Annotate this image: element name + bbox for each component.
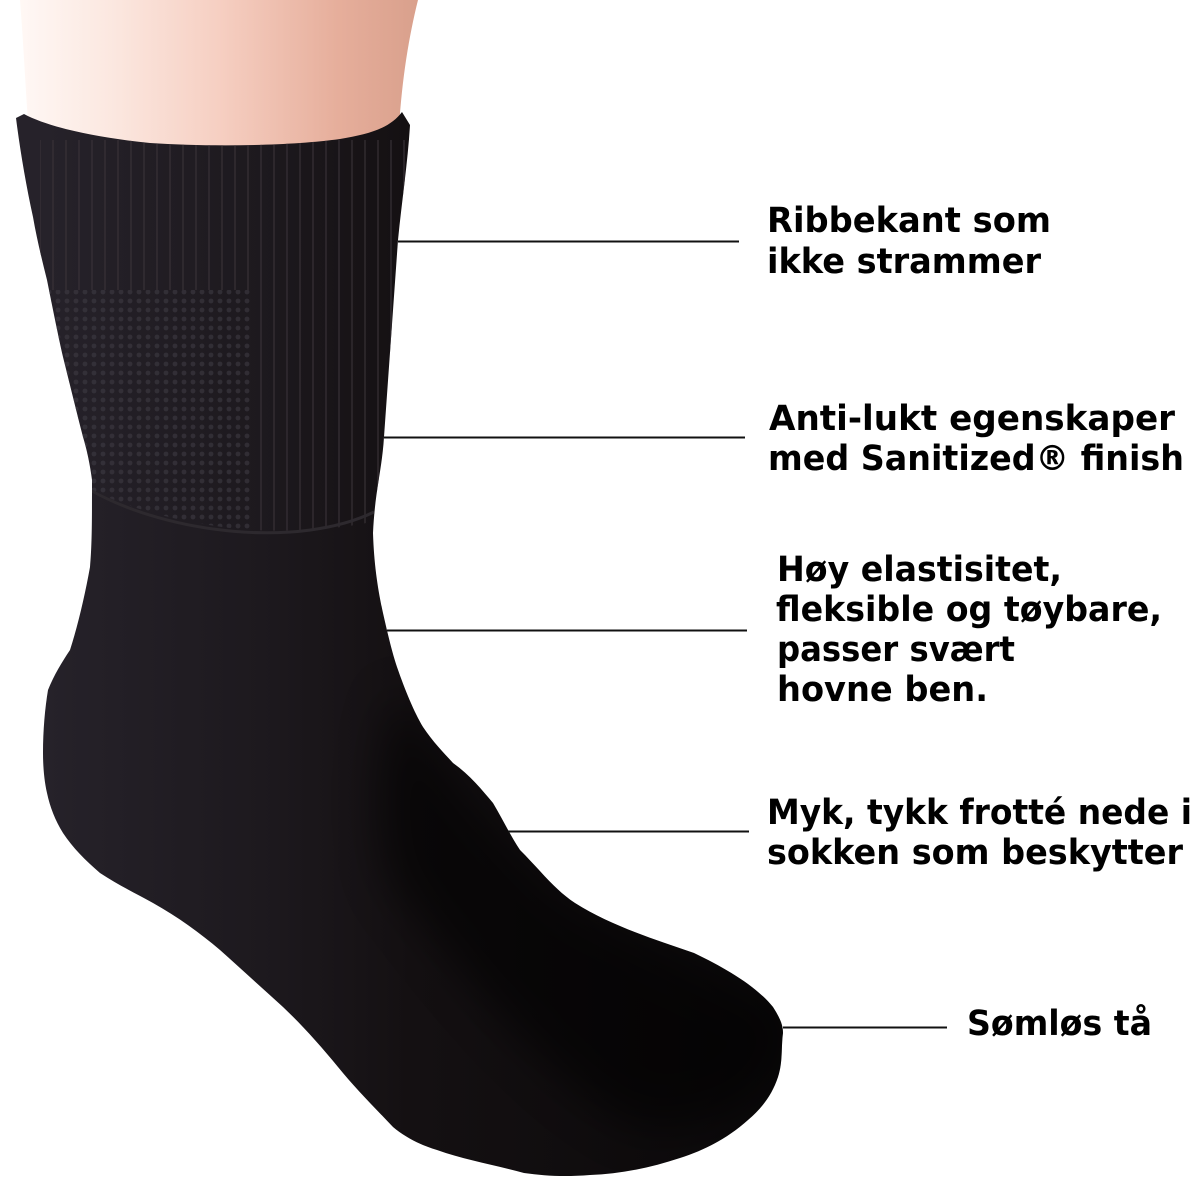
leader line: terry: [508, 830, 749, 832]
label: anti-odour: [768, 399, 1184, 479]
label: terry: [767, 793, 1192, 873]
label: ribbed edge: ikke strammer: [767, 242, 1042, 282]
sock body: [0, 100, 800, 1190]
leader line: rib: [398, 240, 739, 242]
label: elasticity: [776, 550, 1162, 710]
label: ribbed edge: [767, 201, 1051, 282]
ribbed leg panel: [260, 290, 392, 530]
ribbed cuff: [40, 140, 410, 290]
label: elasticity: passer svært: [777, 630, 1015, 670]
label: terry: sokken som beskytter: [767, 833, 1184, 873]
ankle seam: [90, 490, 374, 533]
leader line: anti odour: [384, 436, 745, 438]
label: elasticity: fleksible og tøybare,: [776, 590, 1162, 630]
knit leg panel: [30, 290, 250, 530]
label: elasticity: hovne ben.: [777, 670, 988, 710]
instep dark shading: [379, 690, 791, 1130]
label: elasticity: Høy elastisitet,: [777, 550, 1062, 590]
leg: [20, 0, 418, 150]
label: anti-odour: med Sanitized® finish: [768, 439, 1184, 479]
label: anti-odour: Anti-lukt egenskaper: [769, 399, 1176, 439]
label: ribbed edge: Ribbekant som: [767, 201, 1051, 241]
label: seamless toe: Sømløs tå: [967, 1003, 1152, 1044]
leader line: elasticity: [387, 630, 747, 632]
sock: [0, 100, 800, 1190]
leader line: toe: [783, 1026, 947, 1028]
